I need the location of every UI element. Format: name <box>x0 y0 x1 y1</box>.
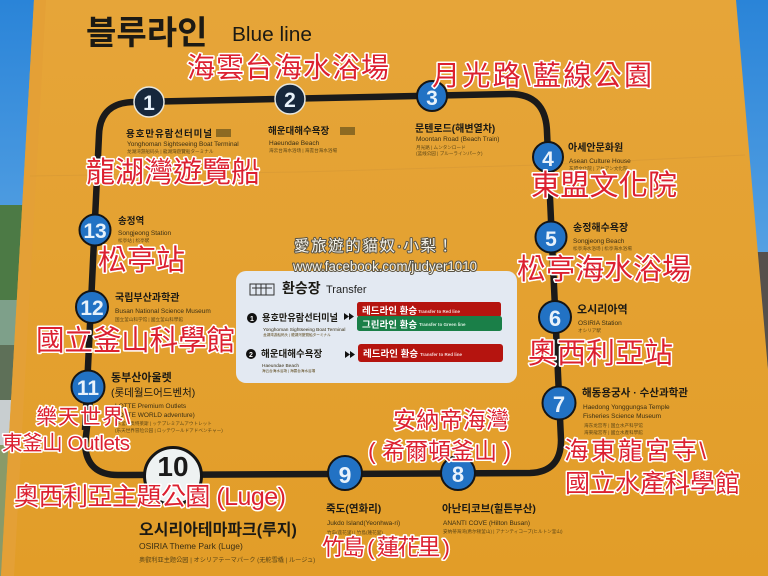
station 6: 오시리아역 <box>577 303 628 316</box>
transfer row 1: Yonghoman Sightseeing Boat Terminal <box>263 327 345 333</box>
station 5: 송정해수욕장 <box>573 221 628 234</box>
watermark <box>292 237 477 274</box>
station 7 <box>542 386 688 436</box>
station 12: 12 <box>80 297 104 320</box>
transfer heading <box>282 280 367 296</box>
red caption: 東釜山 Outlets: 東釜山 Outlets <box>2 432 130 455</box>
station 6 <box>539 301 628 334</box>
station 6: 6 <box>549 306 561 331</box>
transfer row 1: 龙湖湾游船码头 | 龍湖灣遊覽船ターミナル <box>263 332 331 337</box>
red caption: 東盟文化院: 東盟文化院 <box>531 169 677 202</box>
station 7: Haedong Yonggungsa Temple <box>583 404 670 411</box>
transfer row 2 <box>246 344 503 373</box>
station 10: 오시리아테마파크(루지) <box>139 521 297 539</box>
red caption: (希爾頓釜山): ( 希爾頓釜山 ) <box>368 438 511 464</box>
station 10: 10 <box>157 451 189 482</box>
transfer row 2: 해운대해수욕장 <box>261 348 322 360</box>
station 2: 2 <box>284 89 296 112</box>
station 2 <box>268 84 355 154</box>
station 7: 海東龍宮寺 | 國立水產科學館 <box>584 429 643 436</box>
red caption: 海雲台海水浴場: 海雲台海水浴場 <box>187 52 389 83</box>
transfer row 1: 그린라인 환승 <box>362 319 417 331</box>
panel: transfer <box>236 271 517 383</box>
station 9: 9 <box>339 462 351 488</box>
station 3: Moontan Road (Beach Train) <box>416 136 499 143</box>
station 3: (蓝线公园 | ブルーラインパーク) <box>416 150 483 157</box>
title: 블루라인 <box>86 14 207 51</box>
station 4: Asean Culture House <box>569 158 631 165</box>
station 4: 东盟文化院 | アセアン文化院 <box>569 165 628 172</box>
station 1: Yonghoman Sightseeing Boat Terminal <box>127 141 239 148</box>
red caption: 安納帝海灣: 安納帝海灣 <box>393 407 509 433</box>
station 7: 해동용궁사 · 수산과학관 <box>582 386 688 399</box>
station 8: 8 <box>452 462 464 487</box>
station 10 <box>139 448 315 564</box>
transfer row 2: 레드라인 환승 <box>363 348 418 360</box>
station 3: 月光路 | ムンタンロード <box>416 144 466 151</box>
station 6: オシリア駅 <box>578 328 601 334</box>
station 12: 国立釜山科学馆 | 國立釜山科學館 <box>115 316 183 323</box>
station 9: 竹岛(莲花里) | 竹島(蓮花里) <box>327 529 383 536</box>
red caption: 松亭海水浴場: 松亭海水浴場 <box>517 253 691 286</box>
station 5: 5 <box>545 228 557 251</box>
red caption: 奧西利亞主題公園 (Luge): 奧西利亞主題公園 (Luge) <box>14 483 286 511</box>
station 8: 아난티코브(힐튼부산) <box>442 502 536 515</box>
station 13: 13 <box>83 220 107 243</box>
station 11: 동부산아울렛 <box>111 370 172 384</box>
station 12 <box>76 291 211 323</box>
station 1: 龙湖湾游船码头 | 龍湖灣遊覽船ターミナル <box>127 148 214 155</box>
station 12: 국립부산과학관 <box>115 291 179 304</box>
station 12: Busan National Science Museum <box>115 308 211 315</box>
station 13: 송정역 <box>118 215 144 227</box>
station 10: OSIRIA Theme Park (Luge) <box>139 541 243 551</box>
station 5 <box>536 221 632 252</box>
station 9: Jukdo Island(Yeonhwa-ri) <box>327 520 400 527</box>
station 8: ANANTI COVE (Hilton Busan) <box>443 520 530 527</box>
station 1: 용호만유람선터미널 <box>126 128 212 140</box>
station 11: LOTTE WORLD adventure) <box>115 412 195 419</box>
station 10: 奥叡利亚主题公园 | オシリアテーマパーク (无舵雪橇 | ルージュ) <box>139 556 315 564</box>
red caption: 國立釜山科學館: 國立釜山科學館 <box>36 325 235 357</box>
station 8: 安纳蒂海湾(希尔顿釜山) | アナンティコーブ(ヒルトン釜山) <box>443 528 563 535</box>
transfer row 1: 용호만유람선터미널 <box>262 312 338 324</box>
transfer row 2: 海云台海水浴场 | 海雲台海水浴場 <box>262 368 316 373</box>
station 2: Haeundae Beach <box>269 140 320 147</box>
transfer heading: 환승장 <box>282 280 321 296</box>
title: Blue line <box>232 24 312 46</box>
title <box>86 14 312 51</box>
station 1: 1 <box>143 92 155 115</box>
station 9 <box>326 456 400 536</box>
station 11: 11 <box>77 377 99 400</box>
red caption: 海東龍宮寺\: 海東龍宮寺\ <box>564 437 706 465</box>
station 11: LOTTE Premium Outlets <box>115 403 187 410</box>
icon: train <box>250 284 274 295</box>
station 4: 4 <box>542 148 554 171</box>
red caption: 月光路\藍線公園: 月光路\藍線公園 <box>432 60 652 91</box>
watermark: 愛旅遊的貓奴·小梨！ <box>294 237 455 255</box>
red caption: 奧西利亞站: 奧西利亞站 <box>528 337 673 370</box>
station 11: (롯데월드어드벤처) <box>111 387 195 399</box>
station 13: 松亭站 | 松亭駅 <box>118 237 150 244</box>
station 3 <box>415 81 499 157</box>
station 2: 해운대해수욕장 <box>268 125 329 137</box>
red caption: 竹島 (蓮花里): 竹島 ( 蓮花里 ) <box>322 535 450 560</box>
station 7: 海东龙宫寺 | 国立水产科学馆 <box>584 422 643 429</box>
transfer row 1: Transfer to Green line <box>419 322 466 327</box>
transfer row 2: Haeundae Beach <box>262 363 299 369</box>
transfer heading: Transfer <box>326 284 367 296</box>
station 1 <box>126 87 239 155</box>
station 13 <box>80 214 172 246</box>
station 3: 3 <box>426 87 438 110</box>
station 4 <box>533 141 631 172</box>
route line <box>85 94 561 475</box>
red caption: 國立水產科學館: 國立水產科學館 <box>565 470 740 498</box>
station 13: Songjeong Station <box>118 230 172 237</box>
red caption: 松亭站: 松亭站 <box>98 244 185 277</box>
station 11: (东釜山奥特莱斯 | ッテプレミアムアウトレット <box>115 420 212 427</box>
station 5: 松亭海水浴场 | 松亭海水浴場 <box>573 245 632 252</box>
station 11 <box>72 370 223 434</box>
station 8 <box>441 456 563 535</box>
transfer row 1: 레드라인 환승 <box>362 305 417 317</box>
station 7: Fisheries Science Museum <box>583 413 661 420</box>
background: trees on the left <box>0 205 24 576</box>
station 6: OSIRIA Station <box>578 320 622 327</box>
transfer row 1 <box>247 302 502 337</box>
station 5: Songjeong Beach <box>573 238 625 245</box>
station 3: 문텐로드(해변열차) <box>415 122 495 135</box>
transfer row 1: Transfer to Red line <box>418 309 461 314</box>
red caption: 樂天世界\: 樂天世界\ <box>36 406 130 429</box>
transfer row 2: 2 <box>249 352 253 359</box>
background: building on the right <box>755 252 768 370</box>
station 9: 죽도(연화리) <box>326 502 381 515</box>
station 4: 아세안문화원 <box>568 141 623 154</box>
transfer row 1: 1 <box>250 316 254 323</box>
red caption: 龍湖灣遊覽船: 龍湖灣遊覽船 <box>86 156 260 189</box>
transfer row 2: Transfer to Red line <box>420 352 463 357</box>
station 7: 7 <box>553 392 565 417</box>
station 2: 海云台海水浴场 | 海雲台海水浴場 <box>269 147 337 154</box>
watermark: www.facebook.com/judyer1010 <box>292 259 477 274</box>
station 11: (乐天世界冒险公园 | ロッテワールドアドベンチャー) <box>115 427 223 434</box>
